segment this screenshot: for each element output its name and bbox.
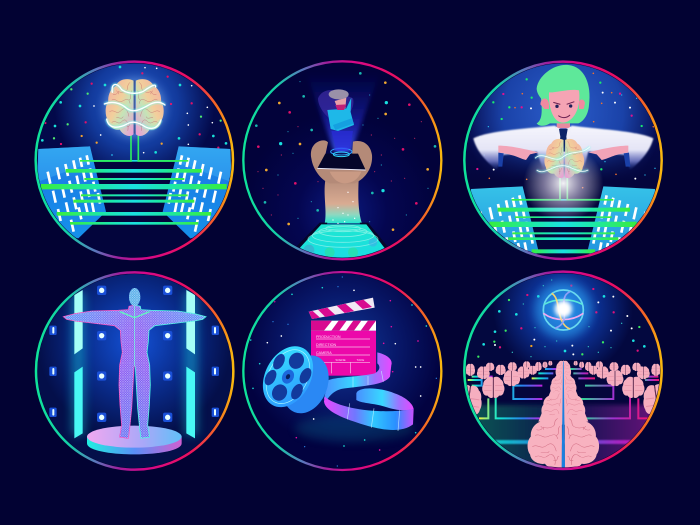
scientist <box>473 65 653 170</box>
holographic person <box>318 89 354 150</box>
dark floor <box>38 160 192 257</box>
brain connector traces <box>522 177 605 200</box>
stars <box>256 73 435 230</box>
lab coat with arms <box>473 126 653 170</box>
green hair <box>537 65 590 126</box>
lower phone with ripples <box>296 222 388 258</box>
handheld phone screen <box>317 147 366 170</box>
stars <box>477 73 655 188</box>
night sky background <box>38 63 232 160</box>
ears <box>540 99 585 109</box>
bottom glow <box>295 415 415 442</box>
blue sky background <box>466 63 660 177</box>
left building <box>35 146 106 238</box>
neon circuit lines <box>41 160 227 225</box>
glow behind brain <box>523 145 603 222</box>
cyan light bar glow <box>72 292 198 435</box>
gradient ring <box>464 62 662 259</box>
clapper top arm <box>309 298 375 319</box>
inner loop of film <box>356 388 414 410</box>
clapper labels <box>316 335 364 362</box>
panel: 3D human scan <box>25 265 242 478</box>
light bar upper right <box>186 290 195 354</box>
neck and tie <box>556 123 571 152</box>
light bar lower left <box>74 367 83 438</box>
upper film ribbon <box>324 352 392 402</box>
scene 1 artwork <box>38 63 232 258</box>
face <box>549 90 579 123</box>
front film band <box>324 397 414 430</box>
left building <box>470 186 538 254</box>
panel: scientist touching brain <box>463 60 663 260</box>
central blue divider <box>562 362 565 468</box>
stars <box>42 67 226 155</box>
scene 3 artwork <box>466 63 660 258</box>
gradient ring <box>36 272 233 470</box>
stars <box>251 277 436 466</box>
neon circuit lines <box>489 199 637 253</box>
film frame marks <box>347 371 400 431</box>
glowing brain <box>535 139 590 178</box>
horizontal light band <box>485 440 638 444</box>
right hand <box>588 146 628 160</box>
central brain column <box>528 360 599 470</box>
gradient ring <box>243 272 441 470</box>
hologram light cone <box>310 79 376 154</box>
clapper body <box>311 321 376 376</box>
scene 2 artwork <box>248 72 436 258</box>
film reel <box>253 337 337 420</box>
glowing brain <box>104 78 165 137</box>
wall lights <box>49 286 219 422</box>
scene 4 artwork <box>25 265 242 478</box>
panel: hologram from smartphone <box>242 60 442 260</box>
left hand <box>498 146 538 160</box>
scanner chamber background <box>25 265 242 478</box>
panel: neural brain over data city <box>34 60 234 260</box>
round platform <box>87 426 182 454</box>
clapper labels: TAKE <box>357 358 364 362</box>
neon circuit lines <box>468 369 659 418</box>
scene 6 artwork <box>453 265 672 477</box>
eyes <box>555 104 572 108</box>
arm and hand <box>311 140 372 223</box>
glowing globe <box>535 282 592 338</box>
facial features <box>553 102 574 118</box>
right building <box>163 146 234 238</box>
right building <box>588 186 656 254</box>
brain connector traces <box>92 133 178 161</box>
dark ground <box>455 360 672 477</box>
stars <box>478 280 644 357</box>
gradient ring <box>464 272 662 469</box>
clapper labels: PRODUCTION <box>316 335 341 339</box>
rising particles <box>333 192 355 223</box>
side brain trees <box>453 361 672 419</box>
wireframe human figure <box>63 288 206 438</box>
panel: brain forest and globe <box>453 265 672 477</box>
sleeve shadows <box>498 153 630 167</box>
light bar lower right <box>186 367 195 438</box>
starfield background <box>248 118 436 246</box>
ground colour glow <box>465 405 662 468</box>
gradient ring <box>243 61 441 259</box>
clapper labels: SCENE <box>335 358 346 362</box>
panel: film clapper and reel <box>238 265 455 478</box>
gradient ring <box>36 62 233 259</box>
scene 5 artwork <box>238 265 455 478</box>
night sky background <box>455 265 672 365</box>
clapper labels: DIRECTION <box>316 343 336 347</box>
clapper labels: CAMERA <box>316 351 332 355</box>
starfield background <box>238 265 455 478</box>
light bar upper left <box>74 290 83 354</box>
dark lower fade <box>466 149 660 257</box>
